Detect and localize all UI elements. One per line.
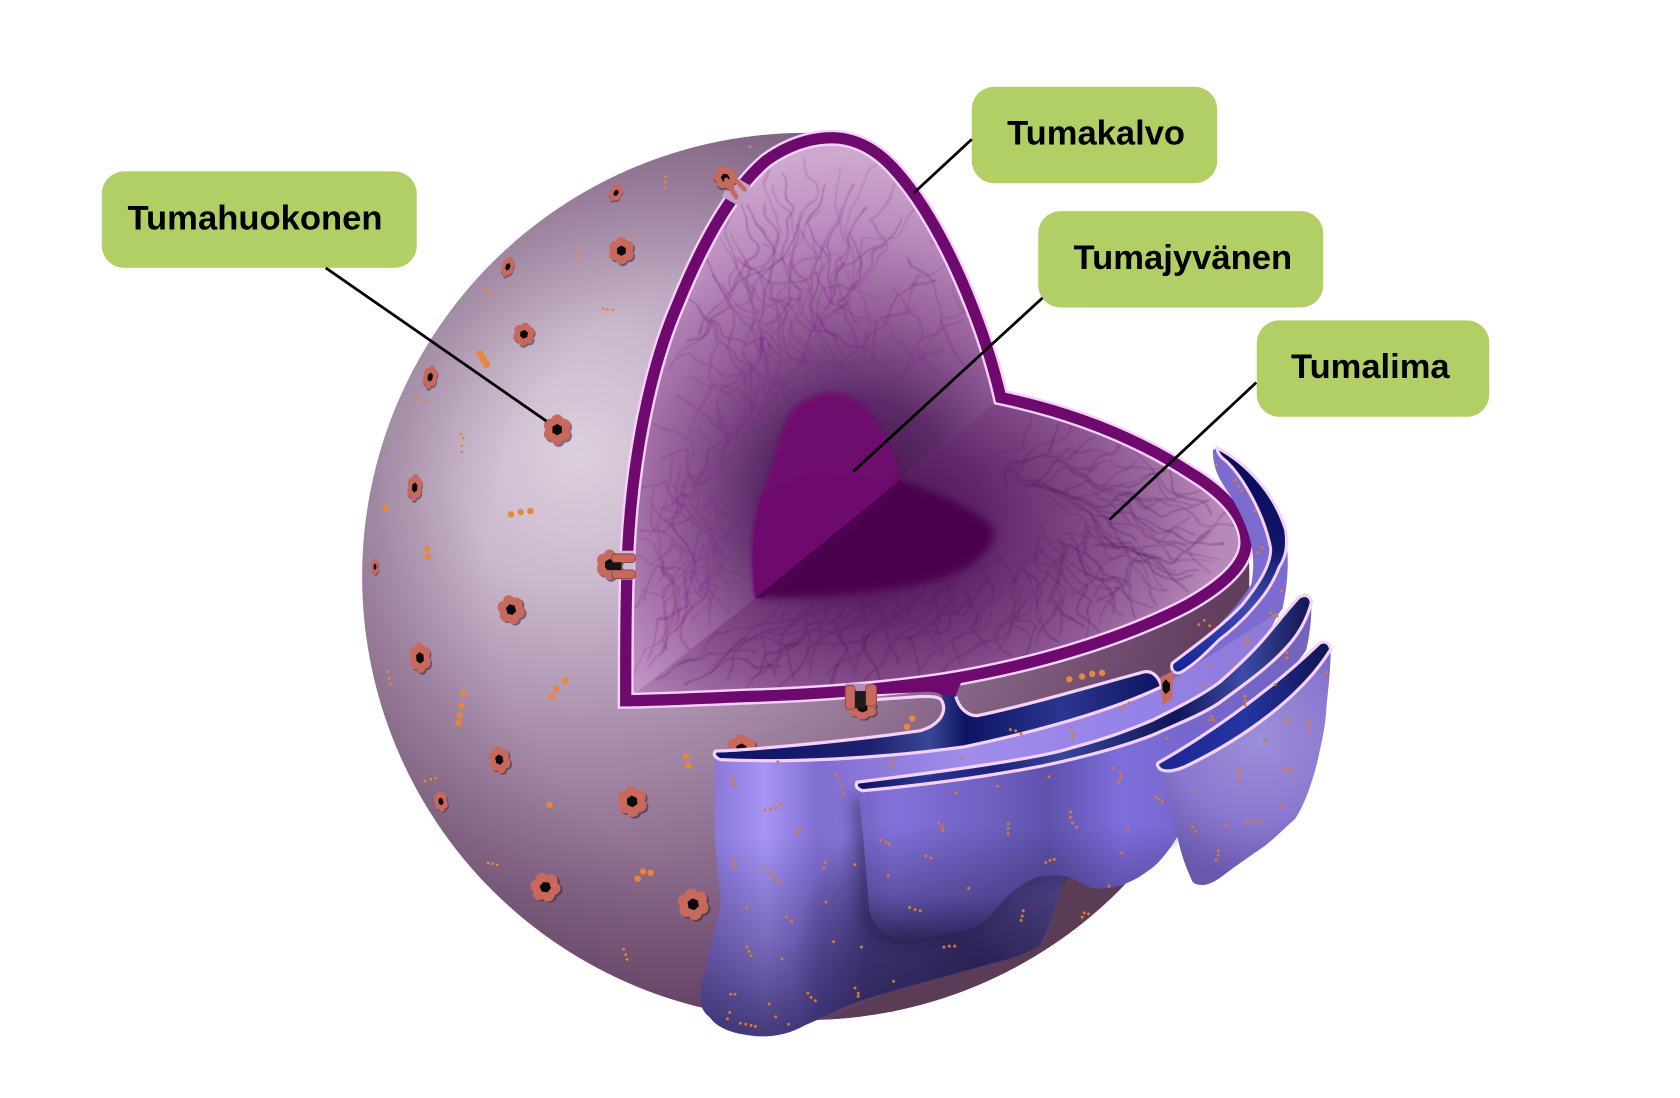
endoplasmic reticulum <box>701 448 1331 1036</box>
nuclear pore beside the reticulum <box>1160 671 1173 705</box>
nucleolus lower part <box>755 480 994 598</box>
label: Tumajyvänen: Tumajyvänen <box>1074 239 1292 277</box>
nuclear pore on the left edge of the envelope <box>597 549 635 582</box>
sheet C lumen <box>1158 642 1331 771</box>
nucleoplasm back wall <box>634 146 994 692</box>
label: Tumajyvänen <box>1038 211 1323 308</box>
sheet B body <box>858 606 1311 938</box>
cut-away interior of the nucleus <box>600 118 1275 718</box>
label: Tumalima: Tumalima <box>1291 348 1451 386</box>
sheet C body <box>1159 647 1331 885</box>
label: Tumakalvo <box>972 87 1217 183</box>
pointer line: Tumakalvo <box>914 139 972 193</box>
nuclear pores on the surface <box>371 182 757 924</box>
ribosome dots on the outer wall <box>907 673 1102 727</box>
ribosome dots on the reticulum <box>728 465 1326 1026</box>
shadow of the lower sheet on sheet A <box>844 790 1178 946</box>
nucleolus upper part <box>752 392 902 598</box>
nuclear envelope <box>626 138 1246 701</box>
nucleoplasm floor <box>636 403 1238 692</box>
label: Tumakalvo: Tumakalvo <box>1007 115 1185 153</box>
sheet B lumen <box>856 595 1311 791</box>
pointer line: Tumahuokonen <box>326 268 546 421</box>
chromatin threads on the back wall <box>634 158 969 690</box>
nucleus sphere with cut-away wedge removed <box>362 133 1249 1020</box>
sphere underside shadow <box>829 876 1126 1020</box>
pointer line: Tumalima <box>1109 382 1256 520</box>
label: Tumahuokonen <box>102 171 417 268</box>
sheet A lumen <box>714 672 1161 761</box>
sheet A body <box>701 612 1279 1036</box>
nuclear pore at the top of the envelope <box>709 162 745 201</box>
pointer line: Tumajyvänen <box>853 298 1042 471</box>
back strip of the reticulum <box>1172 448 1288 707</box>
orange ribosome dots on the sphere <box>386 147 750 959</box>
nuclear pore on the bottom edge of the envelope <box>845 684 878 721</box>
chromatin threads on the floor <box>662 406 1241 686</box>
label: Tumahuokonen: Tumahuokonen <box>128 199 383 237</box>
label: Tumalima <box>1257 320 1489 417</box>
